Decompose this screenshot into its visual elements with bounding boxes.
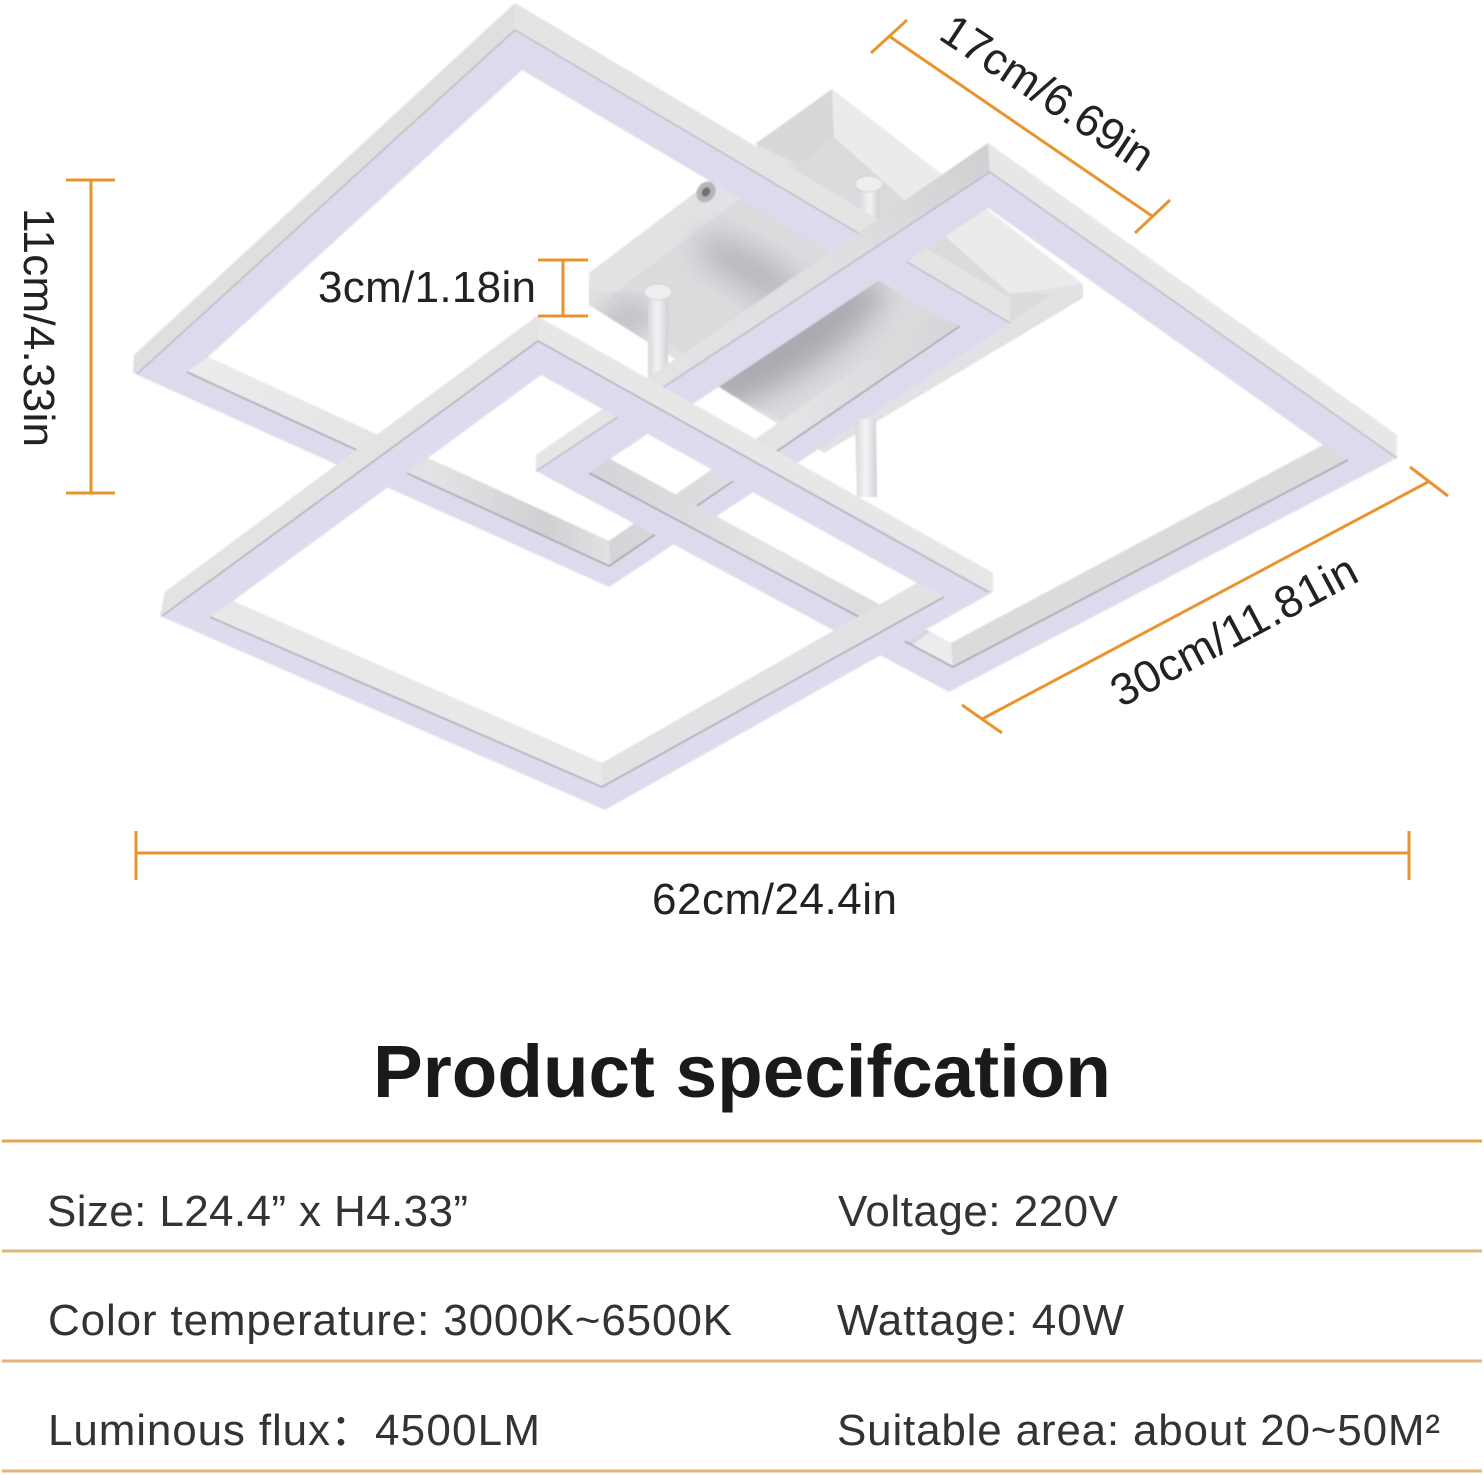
dimension: 62cm: 62cm/24.4in — [652, 875, 897, 924]
title: Product specifcation — [373, 1029, 1111, 1113]
spec: suitable area: Suitable area: about 20~50M² — [837, 1406, 1440, 1455]
spec: color temperature: Color temperature: 3000K~6500K — [48, 1296, 732, 1345]
spec: size: Size: L24.4” x H4.33” — [47, 1187, 468, 1236]
spec: luminous flux: ： — [330, 1406, 374, 1455]
dimension: 30cm: 30cm/11.81in — [1102, 544, 1366, 717]
dimension: height 11cm: 11cm/4.33in — [14, 208, 63, 447]
dimension: 30cm — [962, 467, 1448, 733]
front frame — [160, 316, 993, 810]
ceiling lamp — [133, 3, 1397, 810]
spec: luminous flux: Luminous flux — [48, 1406, 330, 1455]
dimension: height 11cm — [14, 180, 115, 493]
lower post — [855, 419, 877, 497]
screw — [692, 178, 720, 206]
spec: wattage: Wattage: 40W — [837, 1296, 1124, 1345]
posts — [644, 176, 883, 387]
dimension: 17cm: 17cm/6.69in — [931, 4, 1164, 182]
dimension: 3cm: 3cm/1.18in — [318, 263, 536, 312]
dimension: 17cm — [871, 4, 1170, 233]
spec: voltage: Voltage: 220V — [838, 1187, 1119, 1236]
table rules — [2, 1141, 1482, 1471]
spec: luminous flux — [48, 1406, 540, 1455]
mounting plate — [589, 89, 1083, 453]
dimension: 62cm — [136, 831, 1409, 924]
back-right frame — [536, 143, 1397, 692]
spec: luminous flux: 4500LM — [375, 1406, 540, 1455]
back-left frame — [133, 3, 1010, 587]
